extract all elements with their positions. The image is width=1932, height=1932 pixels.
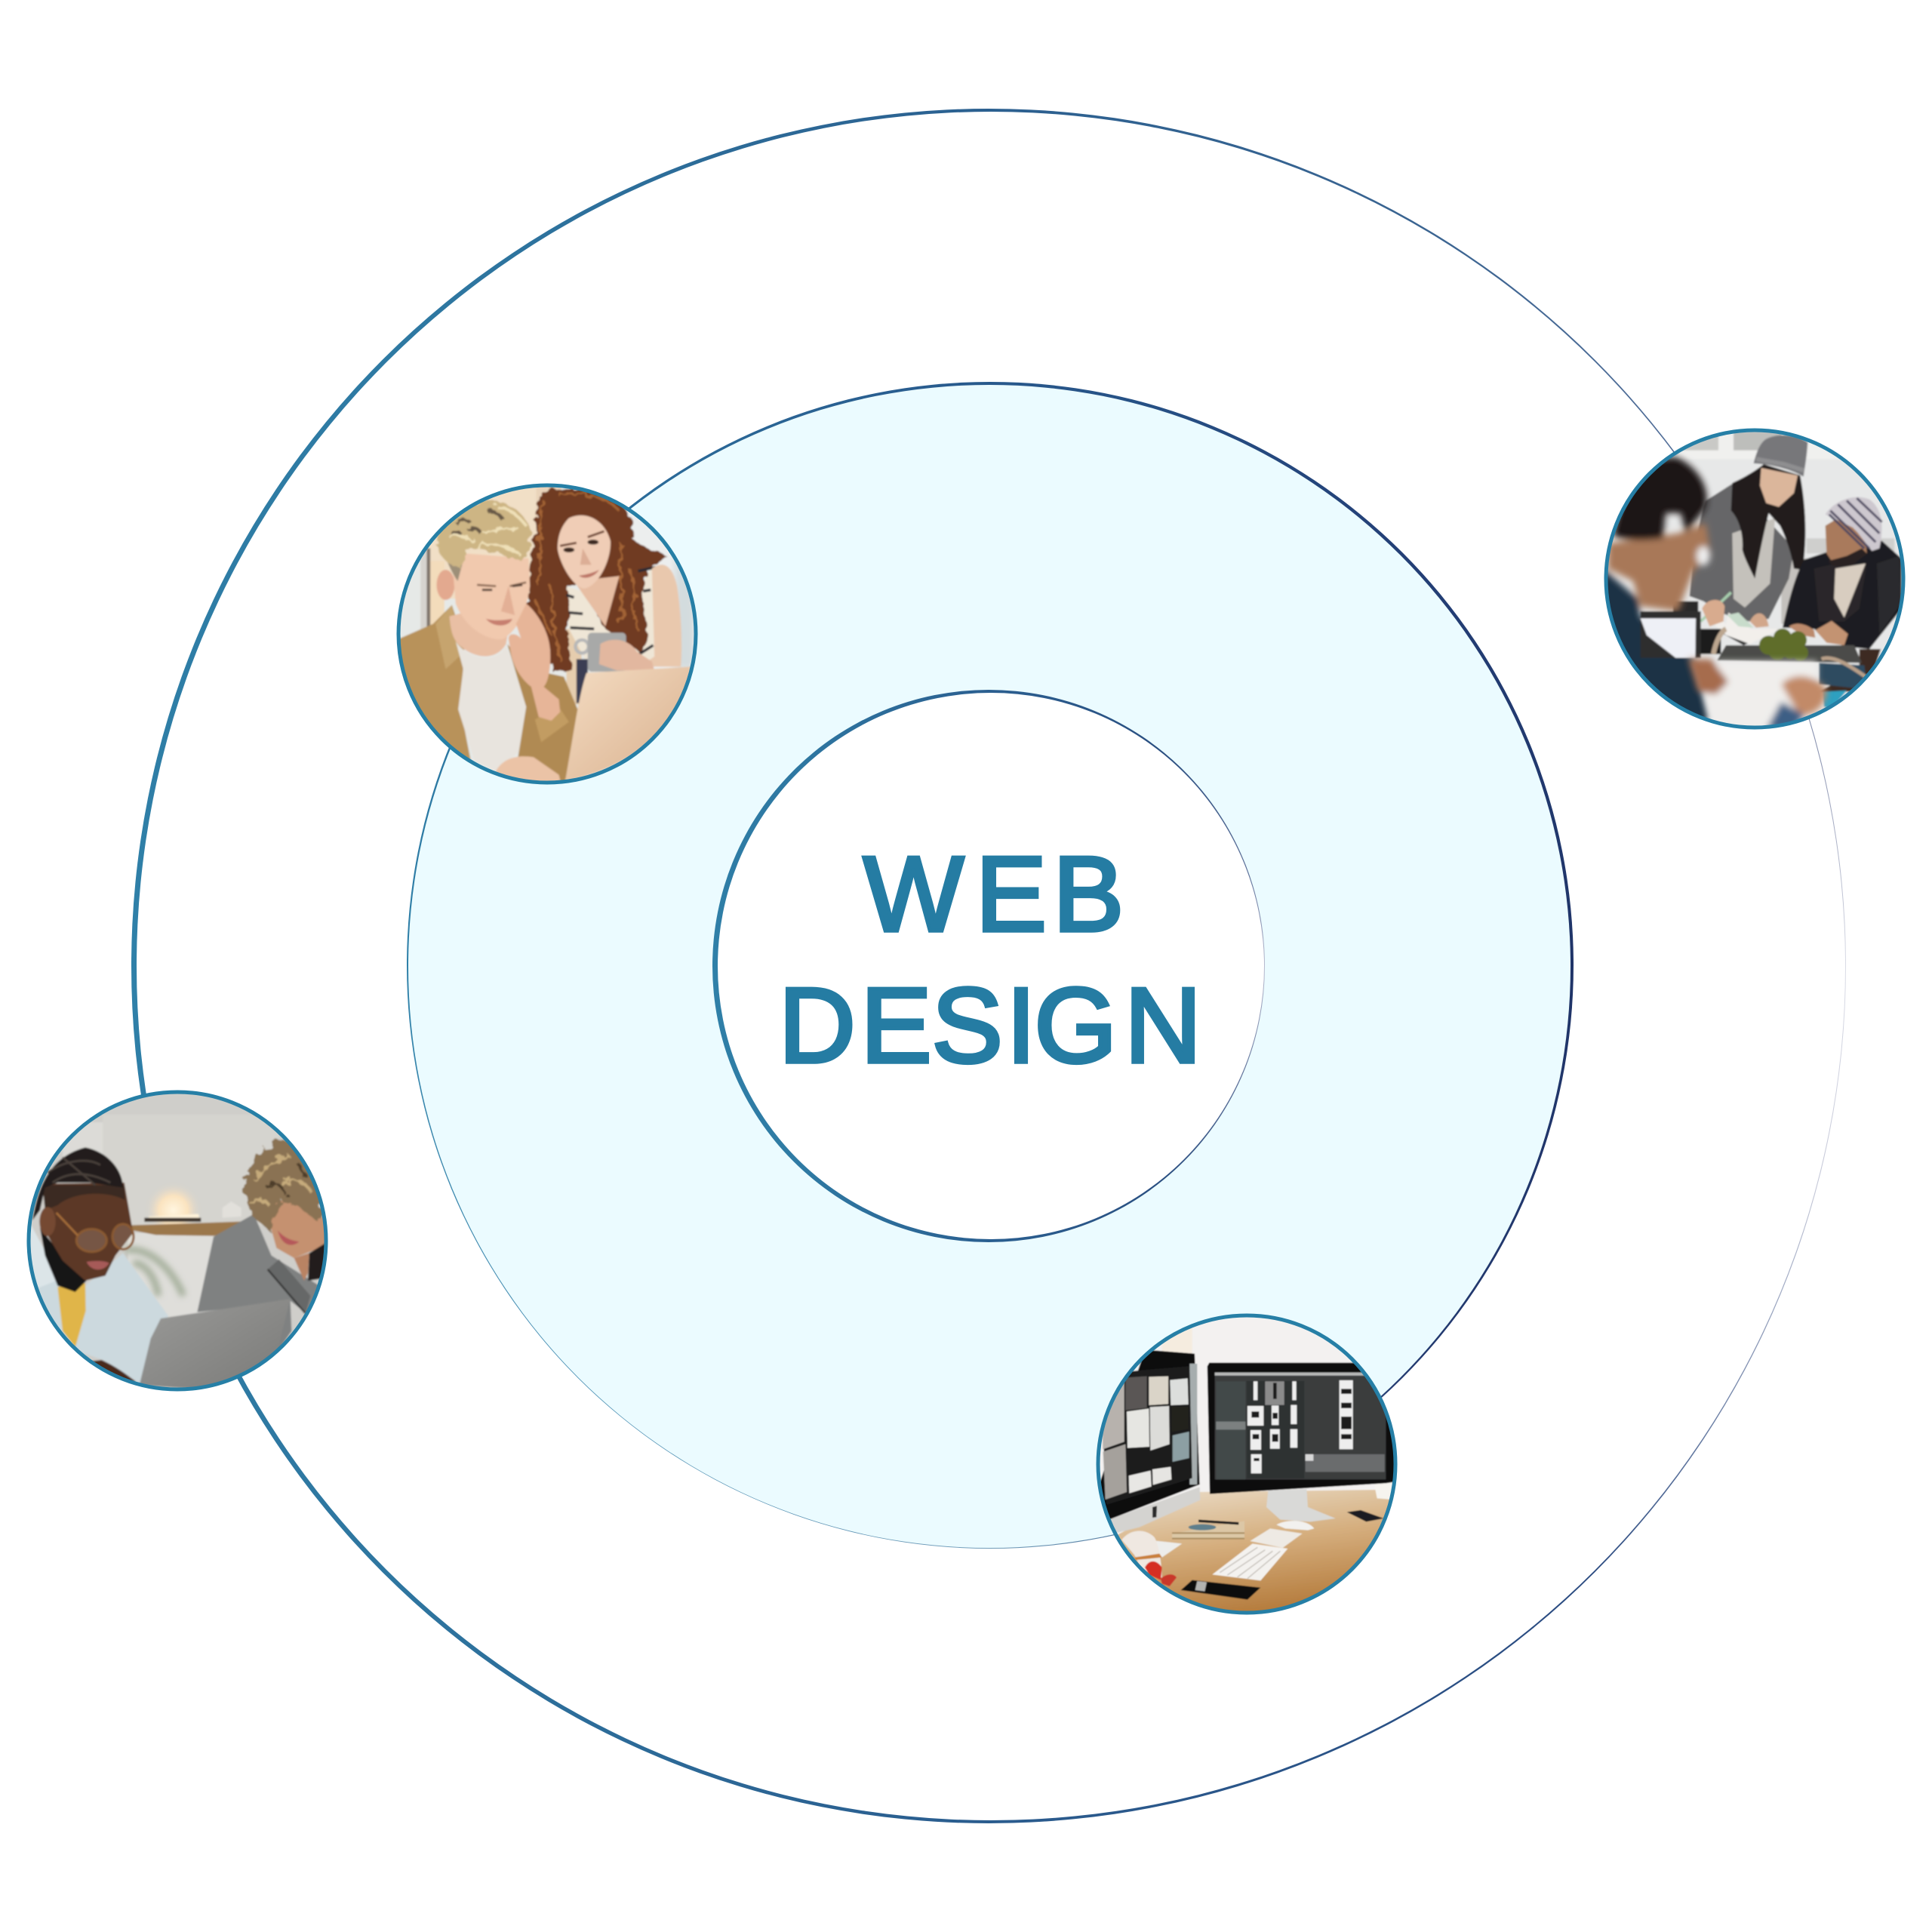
man's jacket [30, 1223, 168, 1383]
seated man's face and beard [1825, 515, 1866, 565]
title: web design [779, 845, 1201, 1072]
white paper and lucky cat [1142, 1540, 1183, 1557]
woman's hair [1730, 464, 1805, 579]
man's jacket [400, 605, 472, 759]
software thumbnails [1247, 1380, 1353, 1473]
photo: two colleagues looking at a laptop [397, 483, 697, 785]
inner circle ring [712, 690, 1265, 1242]
woman's neck and arm [574, 576, 619, 626]
shelf and lamp [128, 1232, 224, 1318]
man's hand [508, 604, 560, 721]
man's face [436, 570, 454, 600]
laptop [565, 666, 691, 781]
man's t-shirt [455, 641, 526, 771]
moss ball [1759, 629, 1808, 661]
photo: team reviewing papers at a table [1604, 429, 1905, 729]
woman's curly hair [243, 1140, 323, 1230]
kitchen cabinets [1680, 434, 1837, 458]
table top and tray [1819, 649, 1881, 692]
woman's jacket [198, 1214, 319, 1353]
trackpad [1251, 1528, 1303, 1548]
photo: two people at a laptop in a bright room [27, 1090, 328, 1392]
braided hair [32, 1147, 123, 1220]
notebooks and pen [1172, 1521, 1244, 1538]
seated man's jacket [1783, 541, 1901, 649]
tortoiseshell glasses [77, 1224, 134, 1251]
woman's beanie [1753, 435, 1807, 477]
black neck wrap [40, 1228, 87, 1292]
outer orbit ring [131, 109, 1846, 1823]
laptop [140, 1299, 291, 1390]
left monitor [1094, 1349, 1200, 1519]
foreground man blurred [1600, 457, 1711, 730]
keyboard [1213, 1543, 1288, 1580]
desk surface [1094, 1489, 1401, 1620]
yellow shirt [58, 1283, 86, 1347]
woman's curly hair [528, 488, 666, 673]
man's blond hair [447, 562, 463, 581]
photo: dual monitor design desk [1096, 1313, 1398, 1615]
plant [126, 1250, 183, 1296]
monitor stand [1266, 1489, 1336, 1521]
laptop screen [1640, 611, 1700, 658]
woman's striped top [566, 569, 655, 660]
left monitor tiles [1102, 1381, 1124, 1449]
striped beanie [1825, 497, 1881, 551]
front phone [1181, 1580, 1261, 1599]
foreground notepad and hands [1688, 659, 1826, 730]
right monitor [1208, 1362, 1395, 1494]
hands and papers on table [1789, 623, 1815, 638]
middle ring with pale blue fill [406, 382, 1573, 1549]
mouse and right phone [1277, 1521, 1315, 1530]
woman's face [270, 1199, 326, 1258]
man's head [43, 1183, 134, 1281]
mug and hand [576, 659, 587, 703]
woman's cardigan [1689, 483, 1794, 621]
woman's face [557, 515, 610, 589]
